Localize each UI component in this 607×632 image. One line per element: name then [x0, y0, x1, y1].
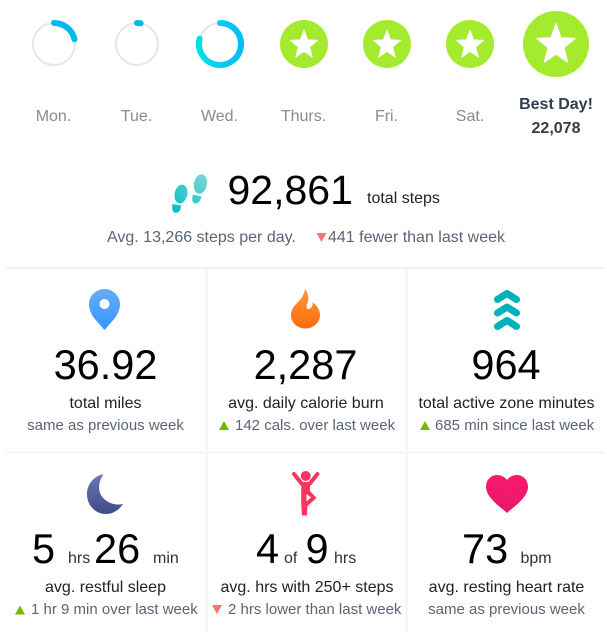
icon: chevrons [498, 294, 516, 326]
day: Tuesday progress ring [116, 23, 158, 125]
day: Friday goal star [363, 20, 411, 125]
sleep comparison: 1 hr 9 min over last week [31, 601, 198, 618]
day: Saturday goal star [446, 20, 494, 125]
average steps per day: Avg. 13,266 steps per day. [107, 229, 296, 246]
miles value: 36.92 [54, 341, 157, 388]
heart rate comparison: same as previous week [428, 601, 585, 618]
icon: map pin [89, 289, 120, 330]
weekly progress row [33, 11, 593, 137]
day: best day star and total [519, 11, 593, 137]
icon: moon [87, 474, 123, 514]
day: Thursday goal star: Thurs. [281, 108, 326, 125]
zone minutes label: total active zone minutes [418, 395, 595, 412]
day: Wednesday progress ring: Wed. [201, 108, 238, 125]
day: best day star and total: Best Day! [519, 96, 593, 113]
day: Monday progress ring: Mon. [36, 108, 71, 125]
day: Tuesday progress ring: Tue. [121, 108, 152, 125]
day: Thursday goal star [280, 20, 328, 125]
miles label: total miles [69, 395, 142, 412]
heart rate value: 73 [462, 525, 508, 572]
calories value: 2,287 [254, 341, 357, 388]
panel: total miles [27, 289, 184, 434]
panel: active zone minutes [418, 294, 595, 434]
sleep value: min [153, 550, 179, 567]
icon: footprints [172, 173, 209, 213]
active hours value: 4 [256, 525, 279, 572]
sleep value: hrs [68, 550, 90, 567]
calories label: avg. daily calorie burn [228, 395, 384, 412]
day: Monday progress ring [33, 23, 75, 125]
sleep value: 26 [94, 525, 140, 572]
panel: calorie burn [219, 289, 396, 434]
day: Friday goal star: Fri. [375, 108, 398, 125]
zone minutes value: 964 [471, 341, 541, 388]
active hours comparison: 2 hrs lower than last week [228, 601, 402, 618]
panel: hours with 250+ steps [212, 471, 402, 618]
panel: restful sleep [15, 474, 198, 618]
heart rate label: avg. resting heart rate [429, 579, 584, 596]
day: Saturday goal star: Sat. [456, 108, 484, 125]
active hours label: avg. hrs with 250+ steps [221, 579, 393, 596]
panel: resting heart rate [428, 475, 585, 618]
miles comparison: same as previous week [27, 417, 184, 434]
total steps number: 92,861 [228, 167, 353, 213]
sleep label: avg. restful sleep [45, 579, 166, 596]
icon: flame [291, 289, 320, 328]
calories comparison: 142 cals. over last week [235, 417, 396, 434]
day: best day star and total: 22,078 [532, 120, 581, 137]
active hours value: 9 [306, 525, 329, 572]
icon: heart [486, 475, 528, 513]
zone minutes comparison: 685 min since last week [435, 417, 595, 434]
active hours value: of [284, 550, 298, 567]
icon: standing figure [294, 471, 318, 516]
heart rate value: bpm [520, 550, 552, 567]
total steps label: total steps [367, 190, 440, 207]
day: Wednesday progress ring [199, 23, 241, 125]
sleep value: 5 [32, 525, 55, 572]
total steps summary [107, 167, 506, 246]
steps change versus last week: 441 fewer than last week [328, 229, 506, 246]
active hours value: hrs [334, 550, 356, 567]
